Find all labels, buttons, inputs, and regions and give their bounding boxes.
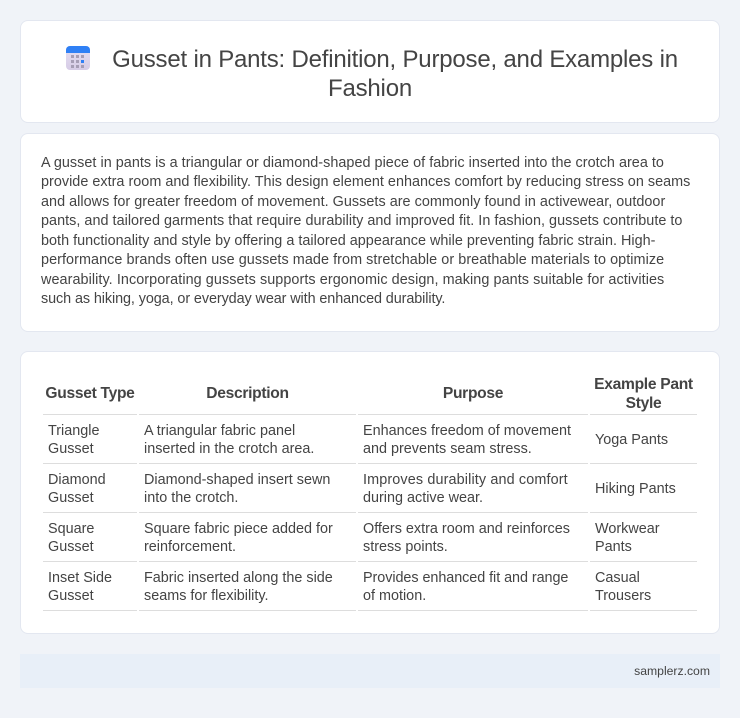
- table header: [45, 376, 693, 412]
- table header: Gusset Type: [45, 385, 135, 402]
- table row: square gusset: Square: [48, 521, 94, 537]
- text block: definition paragraph: and allows for greater freedom of movement. Gussets are commonly found in activewear, outdoor: [41, 194, 665, 210]
- text block: definition paragraph: [41, 155, 690, 307]
- table row: diamond gusset: Diamond: [48, 472, 106, 488]
- text block: definition paragraph: wearability. Incorporating gussets supports ergonomic design, making pants suitable for activities: [41, 272, 664, 288]
- table row: inset side gusset: Fabric inserted along the side: [144, 570, 333, 586]
- table row: diamond gusset: [48, 472, 676, 506]
- table row: triangle gusset: inserted in the crotch area.: [144, 441, 314, 457]
- table row: square gusset: reinforcement.: [144, 539, 236, 555]
- table header: Example Pant: [594, 376, 693, 393]
- table row: diamond gusset: Diamond-shaped insert sewn: [144, 472, 330, 488]
- table row: inset side gusset: Casual: [595, 570, 640, 586]
- text block: definition paragraph: pants, and tailored garments that require durability and improved fit. In fashion, gussets contribute to: [41, 213, 682, 229]
- panel: title header: Gusset in Pants: Definition, Purpose, and Examples in: [112, 46, 678, 73]
- table row: inset side gusset: Provides enhanced fit and range: [363, 570, 568, 586]
- table row: diamond gusset: into the crotch.: [144, 490, 238, 506]
- table row: triangle gusset: Triangle: [48, 423, 99, 439]
- table row: inset side gusset: Trousers: [595, 588, 651, 604]
- table row: triangle gusset: Gusset: [48, 441, 94, 457]
- footer source text: samplerz.com: [634, 664, 710, 678]
- table row: square gusset: Workwear: [595, 521, 660, 537]
- table row: inset side gusset: [48, 570, 651, 604]
- text block: definition paragraph: A gusset in pants is a triangular or diamond-shaped piece of fabric inserted into the crotch area to: [41, 155, 664, 171]
- table header: Style: [626, 395, 661, 412]
- table row: square gusset: Offers extra room and reinforces: [363, 521, 570, 537]
- panel: gusset types table: [20, 351, 720, 634]
- table row: inset side gusset: seams for flexibility.: [144, 588, 268, 604]
- table row: square gusset: stress points.: [363, 539, 448, 555]
- table row: diamond gusset: Gusset: [48, 490, 94, 506]
- table row: triangle gusset: [48, 423, 668, 457]
- table row: inset side gusset: Gusset: [48, 588, 94, 604]
- panel: definition text: [20, 133, 720, 332]
- table row: inset side gusset: of motion.: [363, 588, 426, 604]
- table row: triangle gusset: Enhances freedom of movement: [363, 423, 571, 439]
- table row: triangle gusset: and prevents seam stress.: [363, 441, 532, 457]
- footer bar: [20, 654, 720, 688]
- table row: diamond gusset: Hiking Pants: [595, 481, 676, 497]
- table row: inset side gusset: Inset Side: [48, 570, 112, 586]
- table row: square gusset: Gusset: [48, 539, 94, 555]
- panel: title header: Fashion: [328, 75, 412, 102]
- table row: triangle gusset: A triangular fabric panel: [144, 423, 295, 439]
- table header: Description: [206, 385, 289, 402]
- text block: definition paragraph: performance brands often use gussets made from stretchable or breathable materials to optimize: [41, 252, 664, 268]
- table header: Purpose: [443, 385, 503, 402]
- text block: definition paragraph: provide extra room and flexibility. This design element enhances comfort by reducing stress on seams: [41, 174, 690, 190]
- title: [112, 46, 678, 102]
- table row: diamond gusset: during active wear.: [363, 490, 483, 506]
- table row: square gusset: [48, 521, 660, 555]
- table row: square gusset: Pants: [595, 539, 632, 555]
- icon: calendar: [66, 46, 90, 70]
- panel: title header: [20, 20, 720, 123]
- text block: definition paragraph: both functionality and style by offering a tailored appearance while preventing fabric strain. High-: [41, 233, 656, 249]
- table row: square gusset: Square fabric piece added for: [144, 521, 333, 537]
- table row: triangle gusset: Yoga Pants: [595, 432, 668, 448]
- table row: diamond gusset: Improves durability and comfort: [363, 472, 568, 488]
- text block: definition paragraph: such as hiking, yoga, or everyday wear with enhanced durability.: [41, 291, 445, 307]
